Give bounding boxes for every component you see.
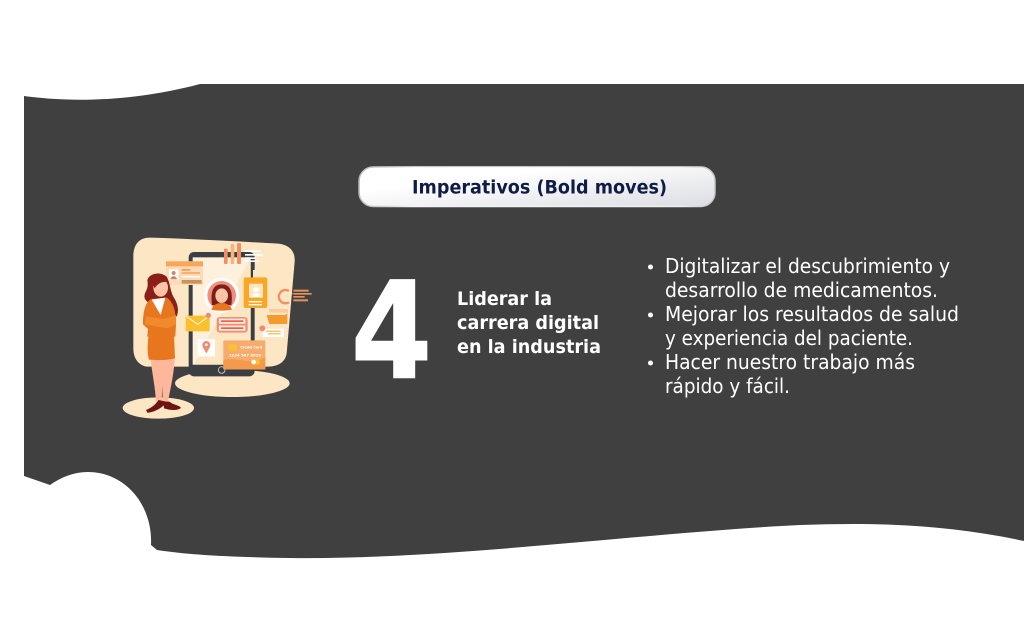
- big number 4: 4: [351, 254, 432, 410]
- bullet list: [648, 254, 959, 398]
- bullet list: rápido y fácil.: [665, 374, 790, 398]
- legs: [151, 358, 175, 402]
- white lines: [245, 250, 263, 262]
- crossed arms: [145, 315, 176, 328]
- envelope: [186, 313, 211, 331]
- heading pill: [359, 167, 715, 206]
- imperative title: Liderar la: [457, 288, 552, 310]
- bullet list: desarrollo de medicamentos.: [665, 278, 938, 302]
- credit card: Credit Card: [240, 346, 263, 350]
- imperative title: carrera digital: [457, 312, 599, 334]
- bullet list: Hacer nuestro trabajo más: [665, 350, 915, 374]
- blouse: [152, 298, 165, 315]
- woman: [143, 273, 181, 413]
- credit card: [223, 340, 265, 369]
- profile circle: [204, 278, 239, 313]
- jacket: [143, 298, 176, 337]
- folder: [267, 309, 288, 324]
- id card: [166, 261, 203, 285]
- bullet list: Digitalizar el descubrimiento y: [665, 254, 950, 278]
- bullet list: Mejorar los resultados de salud: [665, 302, 959, 326]
- map pin card: [198, 339, 215, 356]
- shoes: [146, 400, 166, 413]
- skirt: [148, 335, 175, 360]
- badge: [244, 270, 267, 308]
- chart lines: [293, 290, 312, 301]
- heading pill: Imperativos (Bold moves): [412, 176, 667, 198]
- ground ellipses: [123, 370, 290, 419]
- note: [259, 325, 284, 337]
- hair: [144, 273, 178, 317]
- bars above phone: [224, 243, 241, 264]
- cream blob: [133, 238, 295, 367]
- phone: [189, 252, 255, 376]
- bullet list: y experiencia del paciente.: [665, 326, 913, 350]
- credit card: 1234 567 8910: [229, 354, 261, 358]
- background panel: [24, 84, 1024, 558]
- face: [153, 279, 168, 297]
- password field: [217, 317, 248, 333]
- ring chart: [279, 290, 292, 303]
- imperative title: [457, 288, 601, 358]
- illustration: woman with phone: [123, 238, 312, 419]
- imperative title: en la industria: [457, 336, 601, 358]
